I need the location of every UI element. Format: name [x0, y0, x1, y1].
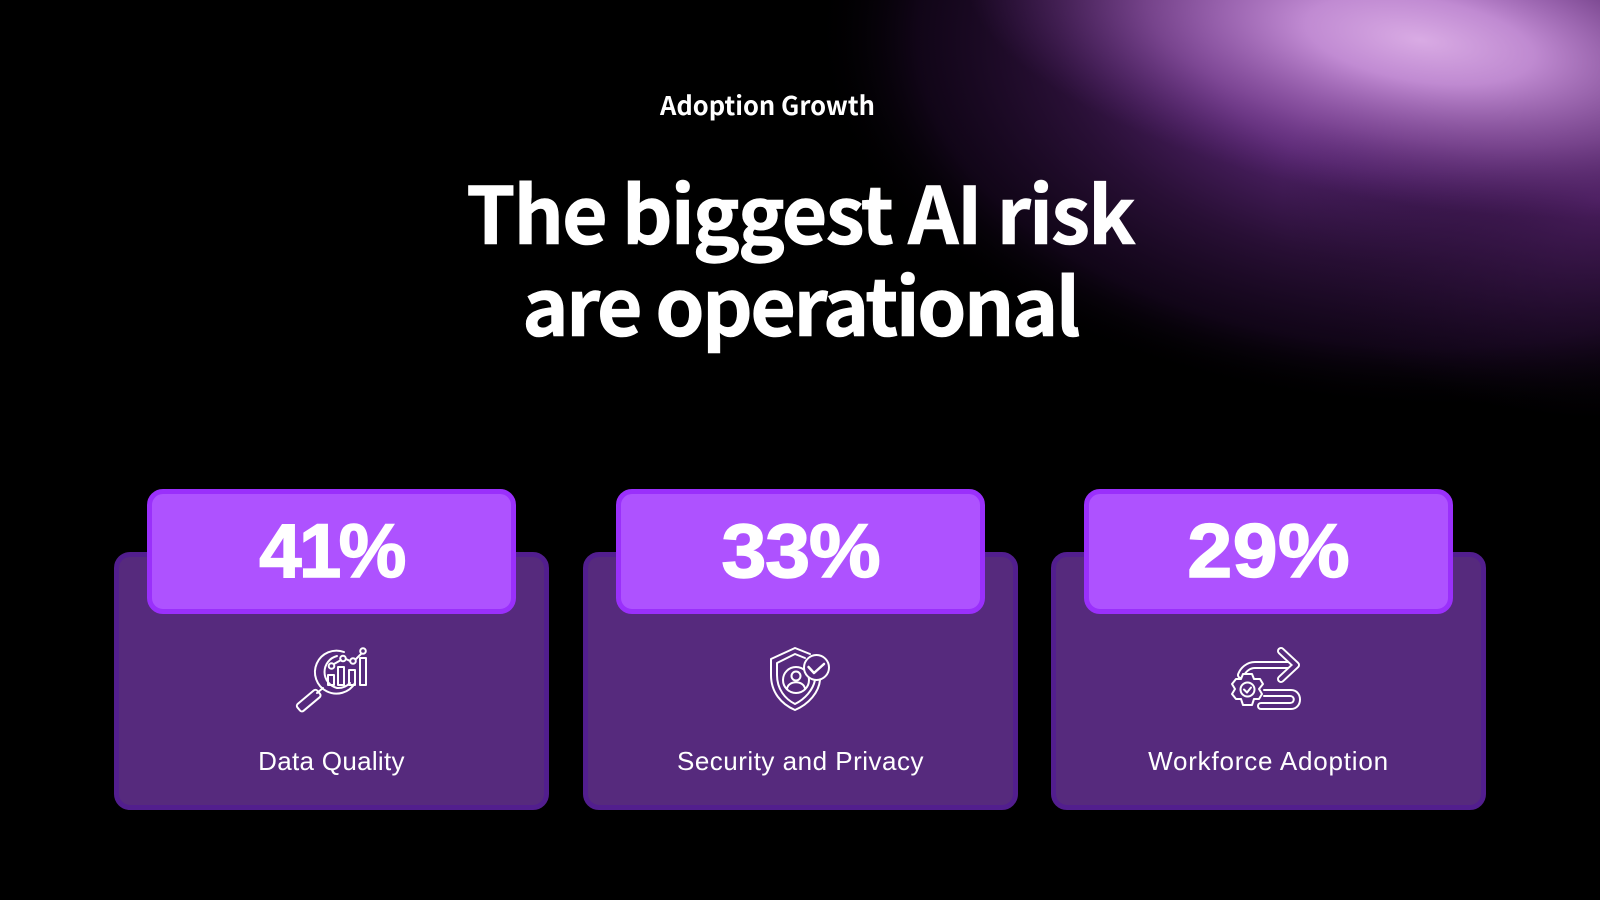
stat badge: 29% — [1084, 489, 1453, 614]
stat badge: 33%: 33% — [721, 509, 880, 594]
panel: security and privacy card — [583, 552, 1018, 810]
icon: shield with person and check — [770, 647, 830, 711]
panel label: workforce adoption: Workforce Adoption — [1148, 746, 1389, 776]
panel label: security and privacy: Security and Privacy — [677, 746, 924, 776]
stat badge: 41% — [147, 489, 516, 614]
stat badge: 29%: 29% — [1187, 509, 1350, 594]
icon: gear with arrow and winding path — [1231, 647, 1301, 710]
panel: workforce adoption card — [1051, 552, 1486, 810]
eyebrow heading: Adoption Growth — [660, 86, 875, 123]
title: are operational — [522, 244, 1078, 359]
panel: data quality card — [114, 552, 549, 810]
stat badge: 33% — [616, 489, 985, 614]
title — [466, 152, 1136, 359]
panel label: data quality: Data Quality — [258, 746, 405, 776]
stat badge: 41%: 41% — [259, 509, 404, 594]
title: The biggest AI risk — [466, 152, 1134, 267]
icon: magnifier over bar chart — [296, 647, 367, 712]
